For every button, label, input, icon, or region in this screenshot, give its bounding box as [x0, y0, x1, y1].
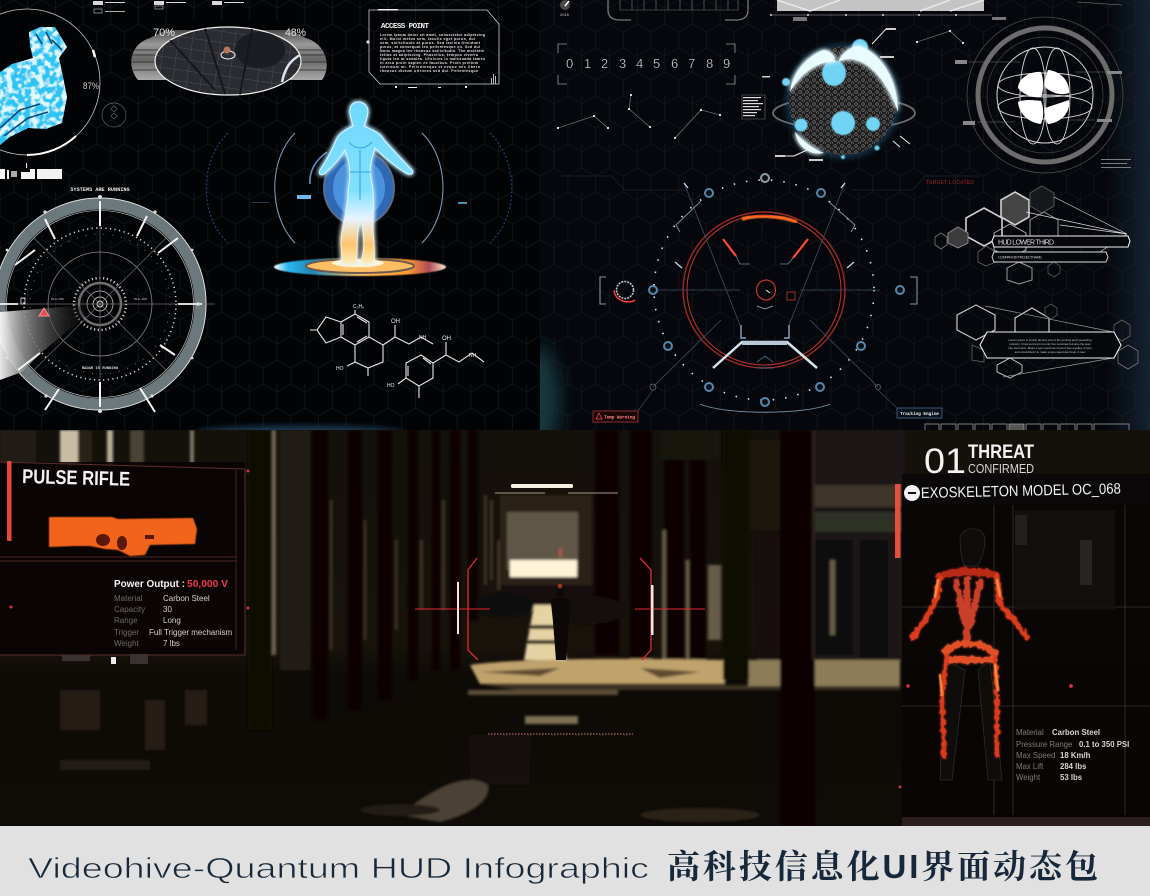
bottom bracket: [713, 341, 817, 368]
holographic globe: [762, 28, 915, 161]
molecule labels: C₂H₅: [353, 304, 364, 310]
threat subtitle: CONFIRMED: [968, 461, 1034, 476]
spec table: Carbon Steel: [163, 594, 210, 603]
left lower reflections: [60, 690, 207, 750]
radar dial: MILLION: [51, 298, 64, 301]
corridor columns: [312, 430, 706, 720]
spec table: [1016, 728, 1129, 782]
dial value: 87%: [83, 81, 99, 91]
warning label: [593, 411, 638, 422]
spec table: 7 lbs: [163, 639, 180, 648]
molecule labels: NH: [469, 353, 477, 359]
spec table: 30: [163, 605, 172, 614]
spec table: Material: [1016, 728, 1044, 737]
small diamond gauge: [102, 103, 126, 127]
node icons: [649, 174, 904, 406]
radar sweep wedge: [0, 304, 100, 380]
exoskeleton figure: [913, 529, 1027, 780]
constellation lines: [557, 2, 1122, 139]
upper left window and pale columns: [60, 430, 90, 464]
spec table: Weight: [114, 639, 140, 648]
threat title: THREAT: [968, 442, 1034, 463]
access point body text: Nunc magna leo rhoncus sollicitudin. The molestie: [380, 49, 484, 53]
top arc brackets: [676, 201, 855, 412]
red accent bar: [7, 461, 12, 541]
access point body text: rhoncus dictum ultricies sed dui. Pellentesque: [380, 69, 478, 73]
spec table: Material: [114, 594, 143, 603]
left gauge: [600, 277, 917, 304]
spec table: Full Trigger mechanism: [149, 628, 232, 637]
molecule labels: [336, 304, 477, 389]
icon: cyan wireframe heart: [0, 27, 67, 145]
description plate: [980, 332, 1121, 358]
chinese title: 高科技信息化UI界面动态包: [667, 848, 1098, 885]
body: [319, 102, 413, 264]
top widgets: [560, 0, 1006, 21]
description plate: and scrambled it to make a type specimen book. A new: [1015, 350, 1086, 354]
red slashes: [723, 239, 808, 258]
small data block: [742, 95, 765, 119]
right percent: 48%: [285, 27, 306, 39]
molecule labels: HO: [387, 383, 395, 389]
description plate: Lorem ipsum is simply dummy text of the printing and typesetting: [1008, 338, 1092, 342]
bright reflections on water: [468, 690, 618, 695]
side markers: [297, 195, 311, 199]
spec table: Max Speed: [1016, 751, 1055, 760]
access point body text: interdum mi. Pellentesque et neque nec libero: [380, 65, 481, 69]
top widgets: 2016: [560, 12, 570, 17]
radar labels: RADAR IS RUNNING: [82, 367, 119, 371]
spec table: Capacity: [114, 605, 145, 614]
warning label: Temp Warning: [604, 414, 635, 420]
gyroscope callouts: [955, 60, 1122, 125]
digit row: 0123456789: [566, 56, 730, 71]
outer dashed arcs: [206, 133, 512, 243]
access point body text: Lorem ipsum dolor sit amet, consectetur adipiscing: [380, 33, 485, 37]
panel: pulse rifle: [0, 461, 250, 664]
access point body text: in arcu proin sapien ex faucibus. Proin pretium: [380, 61, 478, 65]
spec table: Range: [114, 616, 138, 625]
rifle silhouette: [49, 517, 197, 556]
access point panel: [366, 9, 499, 88]
red accent bar: [895, 484, 900, 558]
rubble silhouettes: [475, 593, 535, 617]
molecule labels: OH: [442, 336, 451, 342]
rubble at bottom: [400, 780, 488, 822]
barcode block: [0, 163, 62, 179]
access point heading: ACCESS POINT: [381, 23, 429, 31]
gyroscope sphere: [955, 17, 1131, 173]
access point body text: ligula leo at sodales. Ultricies in malesuada fames: [380, 57, 485, 61]
scene backdrop: [0, 430, 905, 826]
description plate: industry. It has survived not only five centuries but also the leap: [1010, 342, 1091, 346]
spec table: Trigger: [114, 628, 139, 637]
map lens with percentages: [130, 20, 327, 95]
blue disc: [324, 151, 394, 225]
grid overlay: [902, 505, 1150, 815]
header traces: [560, 176, 980, 190]
radar dial: MILLION: [134, 298, 147, 301]
spec table: Carbon Steel: [1052, 728, 1100, 737]
radar alert marker: [39, 308, 49, 316]
spec table: Max Lift: [1016, 762, 1044, 771]
person silhouette: [551, 584, 571, 660]
lower third title bar: HUD LOWER THIRD: [998, 240, 1054, 246]
cross lines: [653, 183, 880, 387]
inner arcs: [275, 133, 443, 243]
molecule labels: HO: [336, 366, 344, 372]
panel markers: [10, 470, 250, 610]
target label: TARGET LOCATED: [926, 180, 974, 186]
spec table: Pressure Range: [1016, 740, 1072, 749]
bottom cell strip: [925, 424, 1129, 432]
panel: warehouse film scene: [0, 430, 1150, 826]
digit row: [558, 44, 735, 84]
panel markers: [898, 684, 1073, 788]
back wall: [500, 495, 592, 585]
foreground columns: [723, 430, 749, 680]
access point body text: sem, sollicitudin at purus. Sed lacinia tincidunt: [380, 41, 481, 45]
description plate: into electronic. Make a type specimen book it has a galley of type: [1008, 346, 1092, 350]
blue haze at bottom edge: [195, 422, 405, 430]
access point body text: elit. Morbi metus sem, iaculis eget purus, dui: [380, 37, 475, 41]
platform: [274, 258, 446, 276]
tracking label: [897, 408, 942, 418]
panel: right HUD screen: [512, 0, 1150, 455]
power output: Power Output :: [114, 578, 185, 590]
target reticle overlay: [415, 484, 705, 734]
spec table: Long: [163, 616, 181, 625]
molecule diagram: [310, 304, 484, 398]
hex lower third A: [935, 186, 1130, 284]
radar title: SYSTEMS ARE RUNNING: [70, 187, 130, 193]
spec table: [114, 594, 232, 648]
left percent: 70%: [153, 27, 175, 39]
molecule labels: OH: [391, 319, 400, 325]
white lobes: [1018, 70, 1069, 124]
panel: left HUD screen: [0, 0, 540, 440]
spec table: 0.1 to 350 PSI: [1079, 740, 1129, 749]
spec table: 53 lbs: [1060, 773, 1083, 782]
tracking label: Tracking Engine: [900, 411, 939, 417]
wet floor strip: [524, 605, 567, 660]
power value: 50,000 V: [187, 578, 228, 590]
panel: exoskeleton threat: [895, 442, 1150, 826]
heading: PULSE RIFLE: [22, 466, 130, 491]
machinery on right: [815, 430, 905, 660]
lower third title bar: [992, 236, 1130, 247]
footer title bar: [0, 826, 1150, 896]
lower third subtitle bar: COMPANY BY PROJECT NAME: [998, 254, 1042, 260]
small status widgets at top: [93, 1, 244, 13]
access point body text: tellus at adipiscing. Phasellus, tempus viverra: [380, 53, 479, 57]
model icon: [904, 485, 920, 501]
targeting reticle: [560, 174, 980, 422]
model heading: EXOSKELETON MODEL OC_068: [921, 480, 1121, 502]
heart scan dial: [0, 9, 126, 179]
hex lower third B: [957, 304, 1138, 378]
english title: Videohive-Quantum HUD Infographic: [28, 853, 649, 885]
holographic human figure: [206, 102, 512, 276]
lower third subtitle bar: [992, 252, 1108, 262]
spec table: 284 lbs: [1060, 762, 1087, 771]
center marker: [756, 280, 776, 300]
molecule labels: NH: [419, 335, 427, 341]
access point body text: purus, at consequat leo pellentesque eu. Sed dui: [380, 45, 480, 49]
radar dial: [0, 187, 215, 413]
threat number: 01: [924, 442, 966, 481]
spec table: 18 Km/h: [1060, 751, 1091, 760]
spec table: Weight: [1016, 773, 1041, 782]
access point body text: [380, 33, 485, 73]
